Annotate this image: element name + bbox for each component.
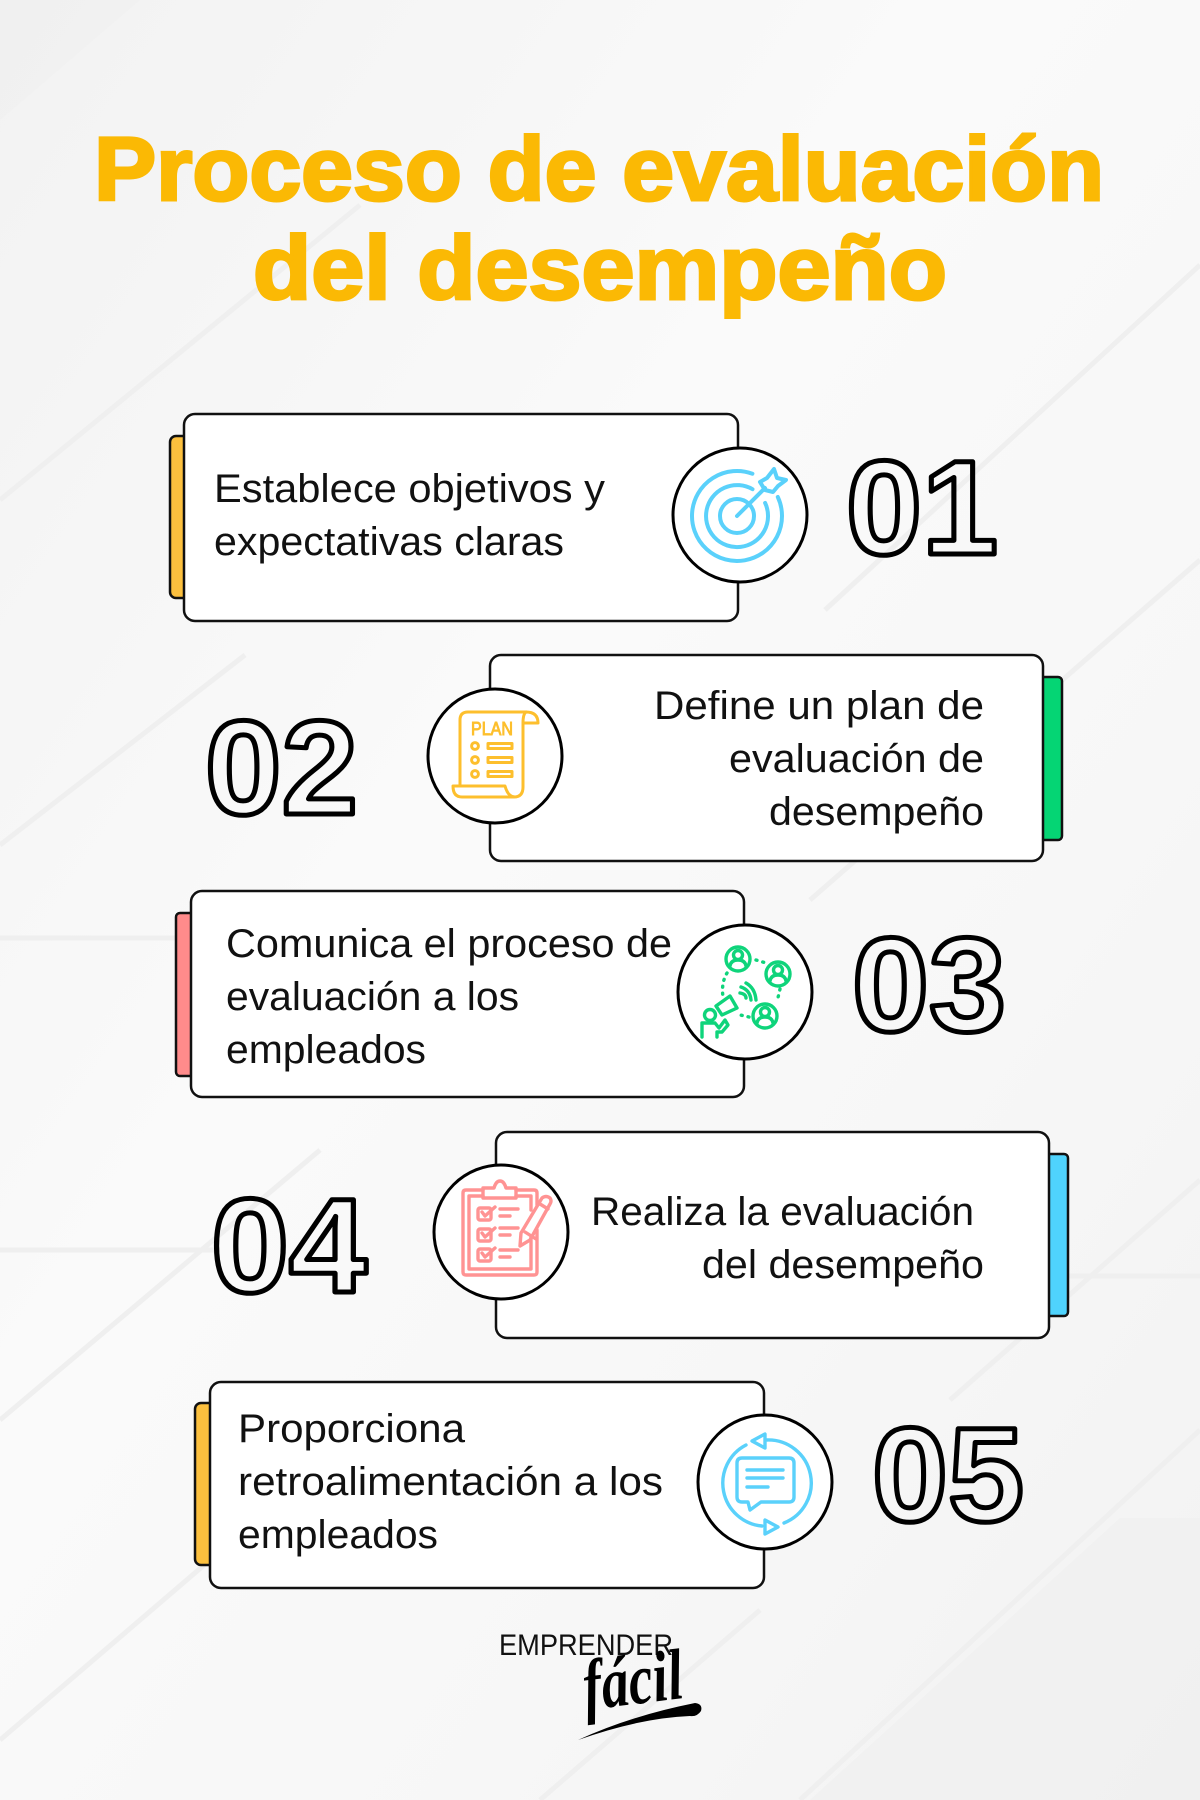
step 1 text: Establece objetivos y [214, 467, 605, 511]
step 2 text [654, 684, 984, 834]
step 4 card [496, 1132, 1049, 1338]
number 03: 03 [852, 911, 1006, 1060]
step 5 icon: feedback chat loop [698, 1415, 832, 1549]
step 2 icon: plan scroll [428, 689, 562, 823]
step 4 icon: clipboard checklist [434, 1165, 568, 1299]
step 2 icon: plan scroll: PLAN [471, 719, 513, 739]
step 5 text: Proporciona [238, 1407, 466, 1451]
number 04: 04 [211, 1172, 367, 1321]
step 3 icon: communication network [678, 925, 812, 1059]
step 2 text: desempeño [769, 790, 984, 834]
step 3 text: Comunica el proceso de [226, 922, 672, 966]
step 3 colour tab [176, 913, 200, 1076]
step 3 text: evaluación a los [226, 975, 519, 1019]
step 3 text [226, 922, 672, 1072]
step 2 panel [428, 655, 1062, 861]
step 1 panel [170, 414, 807, 621]
number 02: 02 [205, 694, 358, 843]
step 1 card [184, 414, 738, 621]
step 4 text: del desempeño [702, 1243, 984, 1287]
step 1 colour tab [170, 436, 194, 598]
step 4 panel [434, 1132, 1068, 1338]
title: Proceso de evaluación [94, 120, 1104, 220]
step 5 colour tab [195, 1403, 219, 1565]
step 4 colour tab [1036, 1154, 1068, 1316]
step 5 card [210, 1382, 764, 1588]
step 5 text: retroalimentación a los [238, 1460, 663, 1504]
step 4 text: Realiza la evaluación [591, 1190, 974, 1234]
step 2 text: Define un plan de [654, 684, 984, 728]
step 5 text [238, 1407, 663, 1557]
step 2 text: evaluación de [729, 737, 984, 781]
step 2 colour tab [1030, 677, 1062, 840]
step 1 icon: target with arrow [673, 448, 807, 582]
step 2 card [490, 655, 1043, 861]
step 3 text: empleados [226, 1028, 426, 1072]
step 3 card [191, 891, 744, 1097]
step 5 text: empleados [238, 1513, 438, 1557]
title: del desempeño [253, 219, 947, 319]
logo: Emprender Fácil: fácil [578, 1634, 687, 1726]
number 05: 05 [872, 1401, 1024, 1550]
step 5 panel [195, 1382, 832, 1588]
number 01: 01 [846, 434, 998, 583]
step 4 text [591, 1190, 984, 1287]
title [94, 120, 1104, 319]
logo: Emprender Fácil [499, 1629, 701, 1740]
step 1 text [214, 467, 605, 564]
step 1 text: expectativas claras [214, 520, 564, 564]
step 3 panel [176, 891, 812, 1097]
logo: Emprender Fácil: EMPRENDER [499, 1629, 673, 1662]
